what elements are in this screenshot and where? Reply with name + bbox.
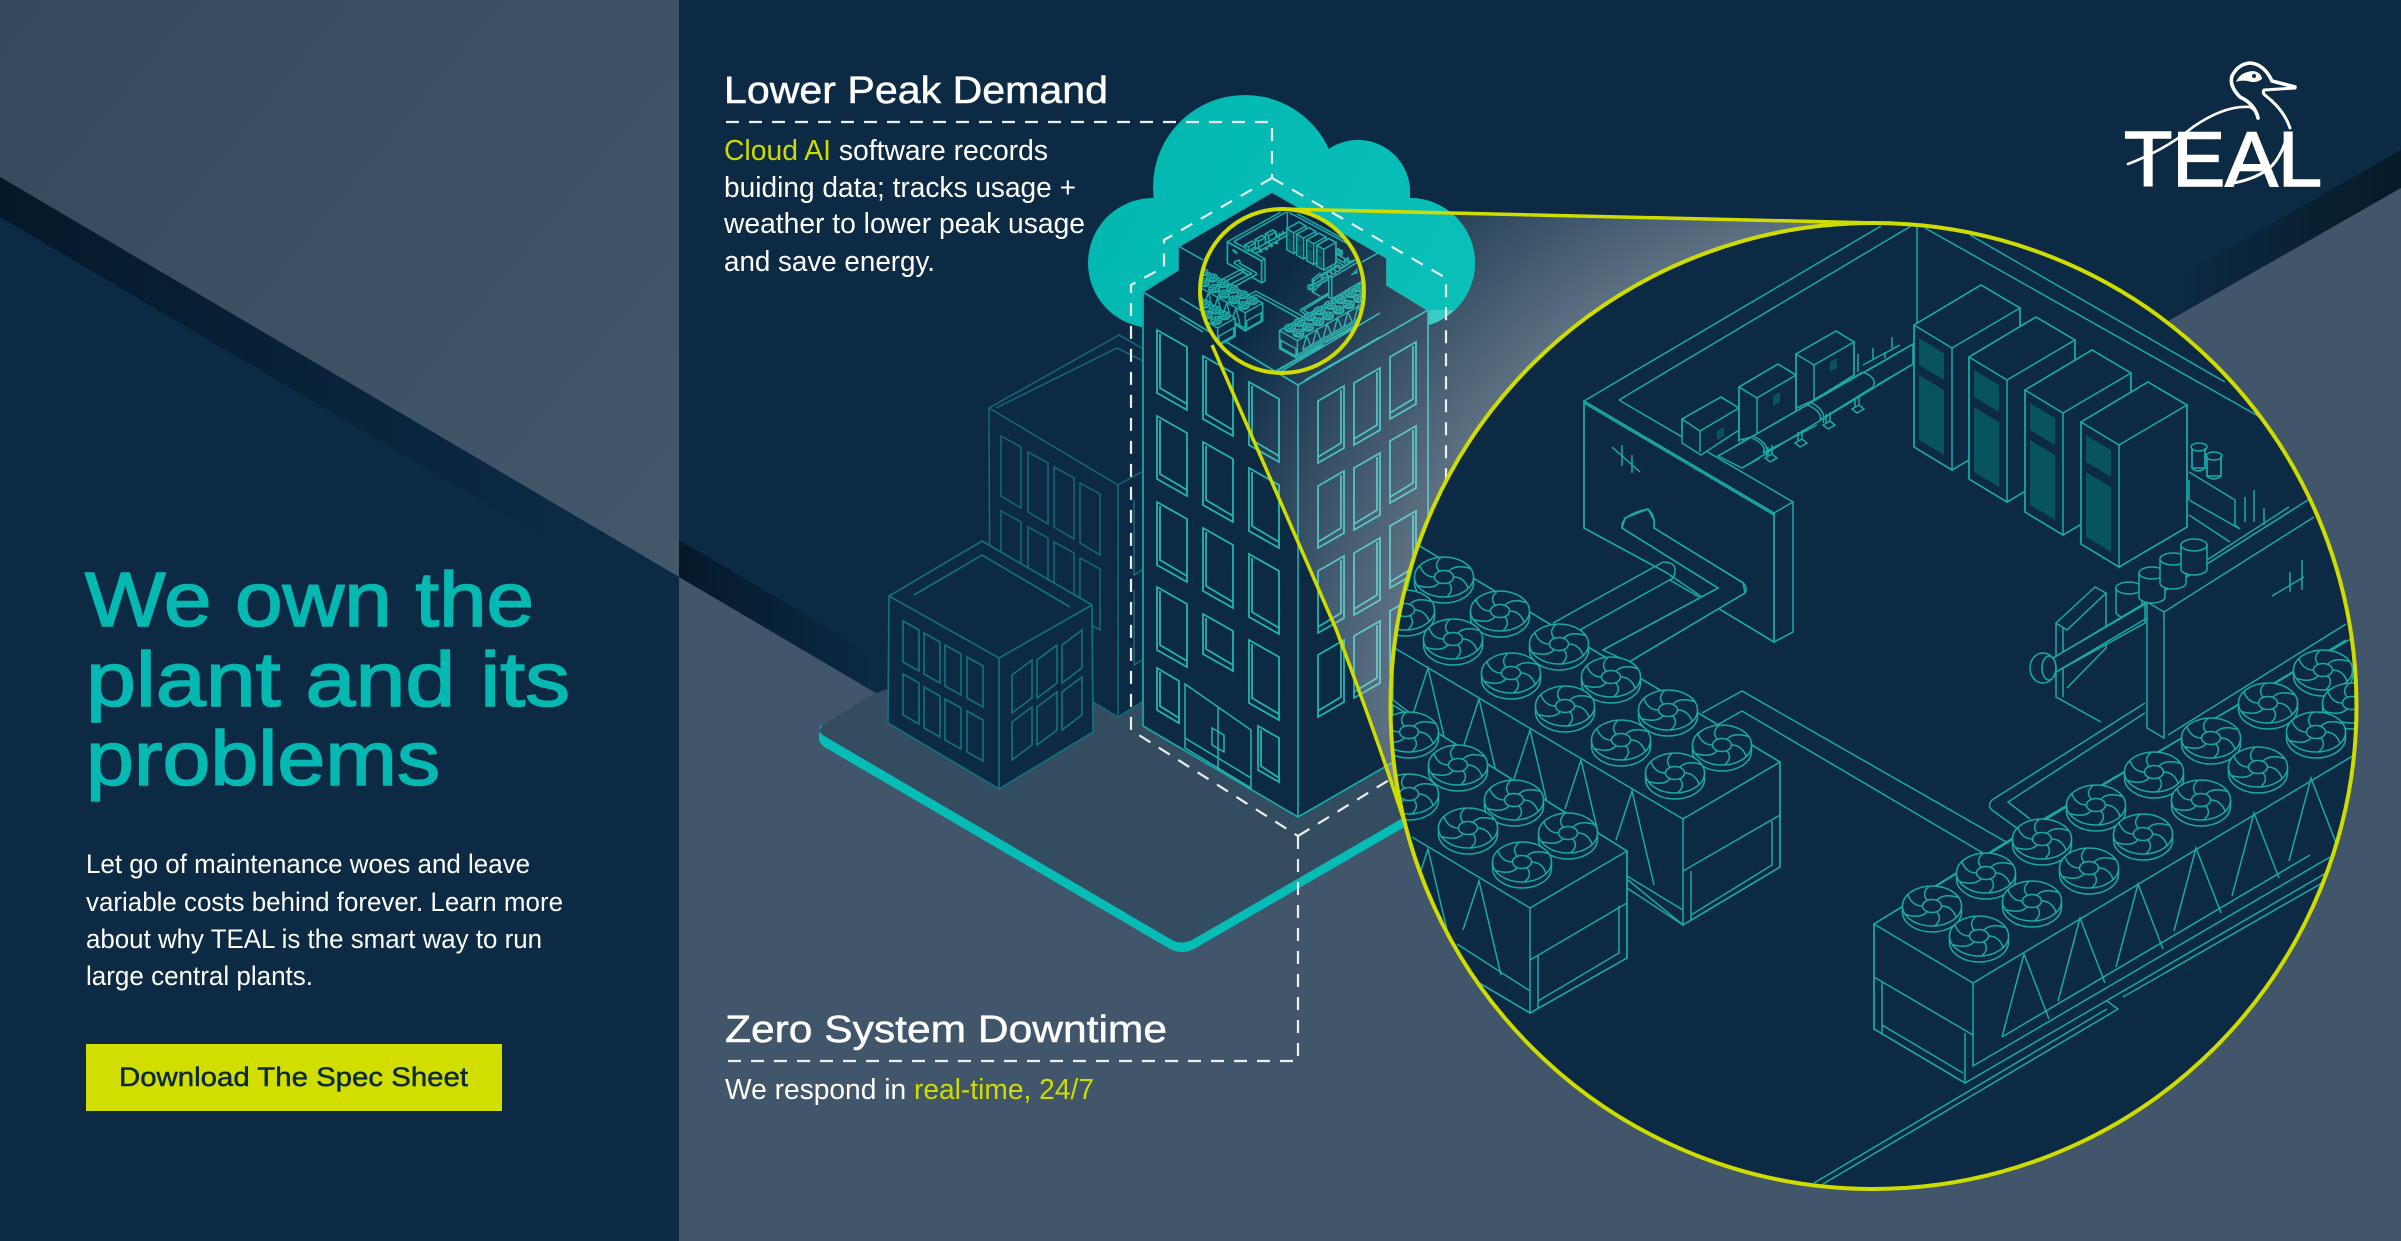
platform bbox=[819, 600, 1420, 952]
magnifier beam bbox=[1191, 209, 1877, 821]
upper right shadow band bbox=[2170, 150, 2401, 320]
icon: duck bbox=[2128, 63, 2295, 183]
mini plant in small lens bbox=[1202, 212, 1362, 371]
rooftop bbox=[1143, 192, 1428, 385]
text: intro paragraph: about why TEAL is the smart way to run bbox=[86, 924, 542, 954]
text: respond in real time: We respond in real-time, 24/7 bbox=[725, 1074, 1094, 1106]
left face windows bbox=[1157, 330, 1279, 782]
dashed callout lines bbox=[726, 122, 1446, 1061]
title bbox=[85, 557, 570, 802]
small building front bbox=[888, 541, 1093, 789]
title: We own the bbox=[85, 557, 534, 643]
text: cloud AI description: buiding data; tracks usage + bbox=[724, 172, 1076, 204]
logo wordmark: TEAL bbox=[2124, 115, 2322, 203]
text: intro paragraph: Let go of maintenance woes and leave bbox=[86, 849, 530, 879]
right face windows bbox=[1318, 342, 1416, 717]
panel: left slate corner bbox=[0, 0, 679, 577]
big lens bbox=[1376, 223, 2400, 1189]
secondary building back bbox=[989, 335, 1145, 717]
text: cloud AI description bbox=[723, 135, 1085, 278]
main building bbox=[1143, 192, 1428, 817]
lens outlines and connecting lines bbox=[1200, 209, 2356, 1189]
door bbox=[1185, 684, 1251, 788]
cloud right lobe over beam bbox=[1290, 140, 1475, 328]
text: cloud AI description: weather to lower peak usage bbox=[723, 208, 1085, 240]
logo: TEAL duck bbox=[2124, 63, 2322, 203]
text: cloud AI description: Cloud AI software records bbox=[724, 135, 1048, 167]
building faces bbox=[1143, 292, 1428, 817]
title: problems bbox=[86, 716, 440, 802]
text: cloud AI description: and save energy. bbox=[724, 246, 935, 278]
right shadow band bbox=[679, 540, 880, 695]
text: intro paragraph: variable costs behind forever. Learn more bbox=[86, 887, 563, 917]
text: intro paragraph: large central plants. bbox=[86, 961, 313, 991]
title: plant and its bbox=[86, 637, 570, 723]
button: download spec sheet bbox=[86, 1044, 502, 1111]
button: download spec sheet: Download The Spec Sheet bbox=[119, 1062, 469, 1092]
icon: cloud bbox=[1088, 95, 1475, 328]
floor: slate ground bbox=[679, 188, 2401, 1241]
plant detail drawing bbox=[1376, 226, 2400, 1184]
text: intro paragraph bbox=[86, 849, 563, 991]
left panel shadow band bbox=[0, 177, 679, 617]
heading: lower peak demand: Lower Peak Demand bbox=[724, 70, 1108, 112]
heading: zero system downtime: Zero System Downtime bbox=[725, 1009, 1167, 1051]
